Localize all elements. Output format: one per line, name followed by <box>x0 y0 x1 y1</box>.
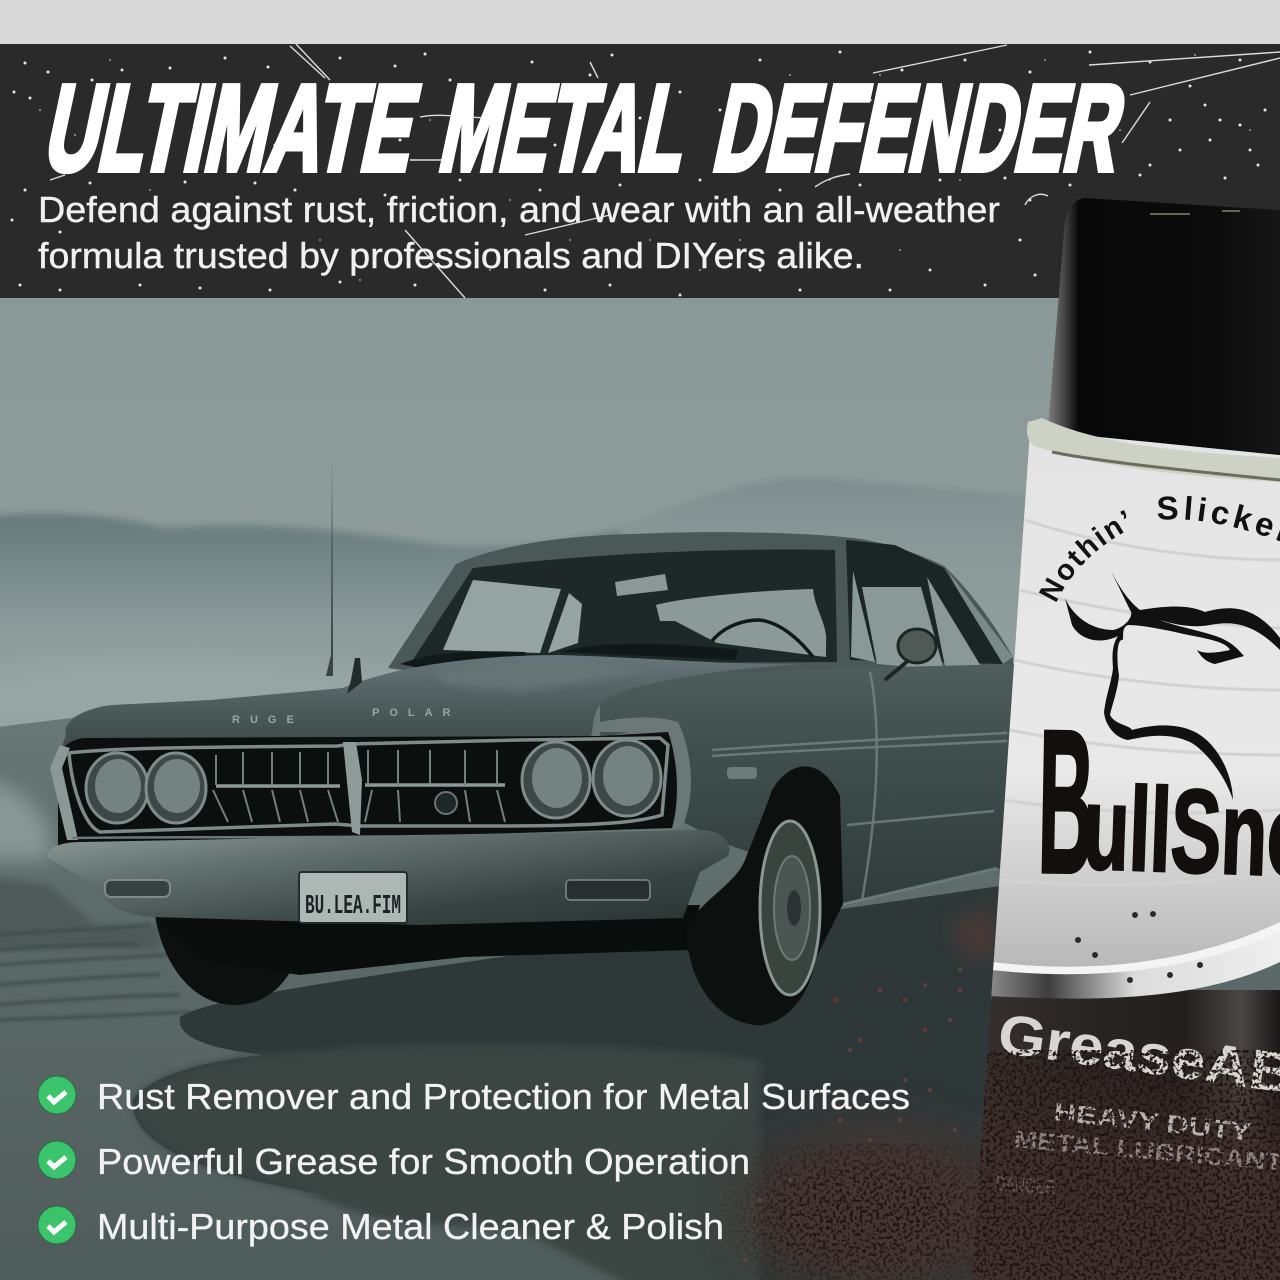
product name on can: GreaseAB <box>994 1001 1280 1105</box>
brand name on can: B <box>1036 687 1096 917</box>
car: fender chrome surround <box>600 718 691 830</box>
check icon 3 <box>38 1206 76 1244</box>
item 3 <box>38 1206 724 1247</box>
can metallic band <box>990 922 1280 999</box>
item 2 text: Powerful Grease for Smooth Operation <box>97 1141 750 1182</box>
car <box>48 460 1018 1025</box>
can cap <box>1048 198 1280 465</box>
car: hood ornament <box>347 658 362 694</box>
can rust overlay <box>976 1074 1280 1280</box>
spray can <box>972 198 1280 1280</box>
car: side windows <box>846 540 1013 671</box>
car: underside <box>150 905 700 975</box>
car: side emblem <box>727 767 757 779</box>
bull logo <box>1065 571 1280 800</box>
car: hood lettering: RUGE <box>232 714 304 726</box>
top margin strip <box>0 0 1280 44</box>
main heading: ULTIMATE <box>35 60 430 197</box>
car: wing mirror <box>885 629 936 680</box>
scratches <box>50 44 1280 298</box>
item 1 <box>38 1076 910 1117</box>
can rust grain <box>960 1050 1280 1280</box>
header band <box>0 44 1280 298</box>
can lower dark section <box>986 990 1280 1190</box>
car: right turn light <box>566 880 650 900</box>
check icon 2 <box>38 1141 76 1179</box>
car: antenna <box>326 460 333 676</box>
car: side body <box>600 664 1018 904</box>
car: front-left wheel <box>153 900 307 1005</box>
label specks <box>1078 914 1200 980</box>
subheading <box>38 189 1000 276</box>
background scene: misty road <box>0 298 1280 1280</box>
car shadow on ground <box>133 880 1040 1280</box>
car: licence plate: BU.LEA.FIM <box>305 892 401 922</box>
check icon 1 <box>38 1076 76 1114</box>
heavy duty line: HEAVY DUTY <box>1052 1098 1253 1147</box>
car: front-right wheel <box>687 766 843 1025</box>
metal lubricant line: METAL LUBRICANT <box>1012 1126 1280 1177</box>
can body <box>960 430 1280 1280</box>
subheading line 2: formula trusted by professionals and DIYers alike. <box>38 235 864 276</box>
headlights <box>86 740 661 823</box>
car: fascia and grille <box>50 732 677 848</box>
car: hood <box>60 655 800 752</box>
car: licence plate <box>299 872 407 923</box>
can white label <box>990 430 1280 1000</box>
main heading: METAL <box>430 60 702 197</box>
cap glint <box>1150 211 1240 214</box>
can rim <box>1027 418 1280 482</box>
feature checklist <box>38 1076 910 1247</box>
car: bumper <box>48 830 729 925</box>
rust dust cloud <box>720 905 1015 1280</box>
main heading <box>35 60 1136 197</box>
speckle texture <box>12 52 1265 295</box>
car: windshield <box>400 550 837 668</box>
faded warning line: DANGER <box>995 1173 1056 1199</box>
item 1 text: Rust Remover and Protection for Metal Surfaces <box>97 1076 910 1117</box>
item 2 <box>38 1141 750 1182</box>
item 3 text: Multi-Purpose Metal Cleaner & Polish <box>97 1206 724 1247</box>
car: hood lettering right: POLAR <box>372 707 460 719</box>
brand name on can <box>1042 730 1280 876</box>
car: left turn light <box>105 880 170 897</box>
subheading line 1: Defend against rust, friction, and wear with an all-weather <box>38 189 1000 230</box>
car: roof and pillars <box>388 532 1013 700</box>
